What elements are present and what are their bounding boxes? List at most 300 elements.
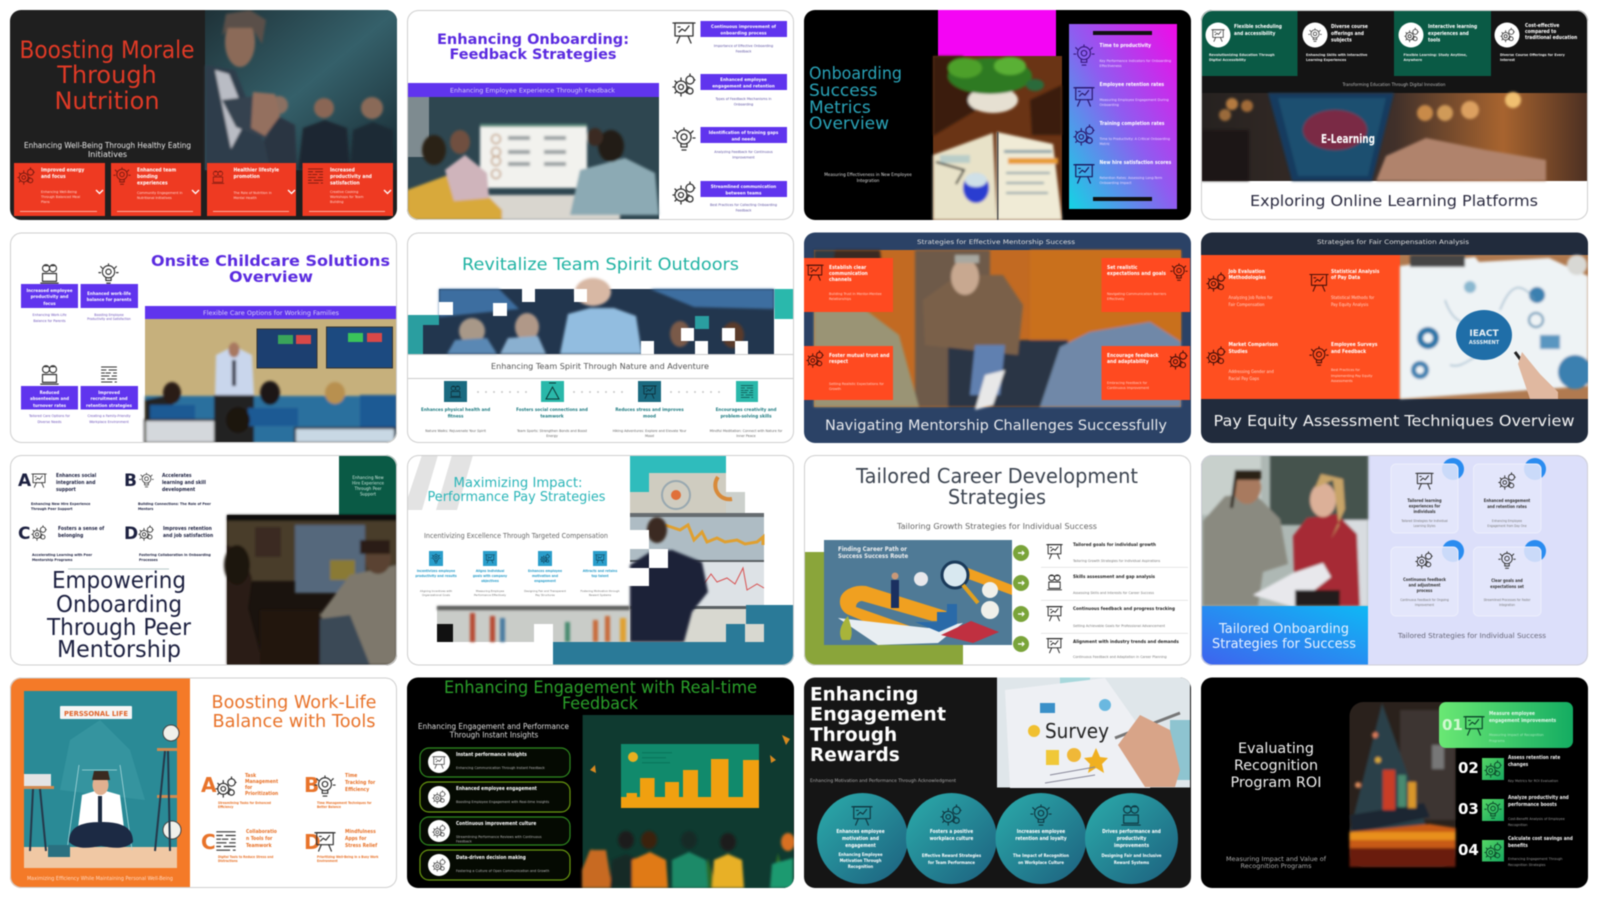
item: continuous improvement: onboarding process (720, 30, 767, 36)
item D: Mindfulness (345, 829, 376, 835)
title: Success (809, 81, 878, 101)
oval: workplace culture (906, 793, 997, 884)
card: clear goals: Streamlined Processes for Faster (1484, 598, 1531, 602)
photo: survey (997, 678, 1190, 788)
item: market comparison (1207, 342, 1278, 382)
item 04: benefits (1508, 843, 1528, 849)
item: align goals (473, 551, 507, 597)
item A: Prioritization (245, 791, 278, 797)
card: clear communication: channels (829, 277, 852, 283)
title (151, 254, 390, 283)
item 02: Assess retention rate (1508, 755, 1560, 761)
feature: flexible scheduling: and accessibility (1234, 31, 1275, 37)
item 04: Recognition Strategies (1508, 863, 1546, 867)
title (1230, 741, 1322, 791)
oval: motivation: Enhancing Employee (838, 852, 883, 857)
card: continuous feedback: Improvement (1415, 603, 1435, 607)
row: data-driven: Data-driven decision making (456, 855, 526, 861)
header text: Strategies for Effective Mentorship Success (917, 238, 1076, 246)
card: tailored learning (1391, 464, 1458, 533)
title: Overview (229, 268, 313, 286)
feature: cost-effective: Cost-effective (1525, 23, 1559, 29)
card: healthier lifestyle: The Role of Nutrition in (234, 191, 272, 195)
item: creativity: Mindful Meditation: Connect with Nature for (710, 429, 783, 433)
card: increased productivity: Increased (330, 168, 355, 174)
item: productivity: productivity and results (415, 574, 457, 578)
item: reduces stress: mood (643, 414, 656, 420)
title: Strategies (948, 485, 1046, 509)
card: healthier lifestyle: promotion (234, 174, 260, 180)
card: increased productivity (302, 163, 393, 216)
row: improvement culture: Feedback (456, 840, 472, 844)
item C: C (18, 524, 30, 544)
row: industry alignment (1047, 639, 1179, 659)
row: skills assessment: Skills assessment and gap analysis (1073, 574, 1156, 580)
feature: diverse course: Diverse course (1331, 24, 1368, 30)
oval: workplace culture: Effective Reward Strategies (922, 853, 982, 858)
item A (18, 471, 97, 511)
item: motivation: Designing Fair and Transparent (524, 589, 566, 593)
item B: Time Management Techniques for (317, 801, 372, 805)
title: Through Peer (46, 615, 192, 641)
item 02 (1458, 755, 1560, 783)
item 03: 03 (1458, 800, 1479, 818)
item: work-life balance: Enhanced work-life (87, 291, 131, 297)
item: market comparison: Studies (1228, 349, 1248, 355)
photo: mentoring discussion (814, 250, 1181, 410)
panel: Tailored Onboarding (1201, 455, 1588, 666)
title: Evaluating (1238, 741, 1314, 757)
blue title block: Strategies for Success (1212, 637, 1356, 652)
subtitle (418, 722, 569, 740)
item: creativity (710, 381, 783, 438)
title: Through (56, 61, 157, 89)
panel: Revitalize Team Spirit (407, 232, 794, 443)
card: clear goals: expectations set (1490, 584, 1524, 589)
row: data-driven: Fostering a Culture of Open Communication and Growth (456, 869, 549, 873)
item 02: Key Metrics for ROI Evaluation (1508, 779, 1558, 783)
card: feedback and adaptability (1102, 346, 1190, 400)
title: Performance Pay Strategies (428, 490, 606, 505)
subtitle: Tailoring Growth Strategies for Individual Success (896, 522, 1097, 531)
metrics panel (1069, 24, 1177, 209)
feature: diverse course: Learning Experiences (1306, 58, 1346, 62)
blue title block: Tailored Onboarding (1218, 622, 1349, 637)
item: recruitment: Workplace Environment (89, 420, 129, 424)
item: engagement and retention: Enhanced employee (720, 77, 767, 83)
item: engagement and retention: Onboarding (734, 102, 753, 106)
item B: Efficiency (345, 787, 369, 793)
item: training completion: Metric (1100, 142, 1110, 146)
item: productivity: Aligning Incentives with (420, 589, 452, 593)
subtitle: Integration (857, 178, 880, 184)
item: reduced absenteeism: turnover rates (33, 403, 67, 409)
item: productivity and focus: Enhancing Work-Life (32, 313, 66, 317)
subtitle: Through Instant Insights (449, 730, 538, 740)
item: productivity and focus (21, 265, 78, 323)
item D: Stress Relief (345, 843, 377, 849)
oval: retention and loyalty: The Impact of Recognition (1013, 853, 1069, 858)
card: realistic expectations: expectations and goals (1107, 271, 1166, 277)
item: social connections (516, 381, 588, 438)
item 02: 02 (1458, 759, 1479, 777)
title (212, 692, 376, 732)
item: reduces stress: Hiking Adventures: Explore and Elevate Your (613, 429, 687, 433)
title: Boosting Morale (20, 36, 194, 64)
subtitle: Initiatives (88, 150, 127, 159)
panel: Onsite Childcare (20, 254, 398, 444)
item: social connections: teamwork (540, 414, 564, 420)
row: employee engagement (420, 782, 570, 812)
card: feedback and adaptability: Continuous Improvement (1107, 386, 1150, 390)
title: Rewards (810, 745, 900, 766)
card: tailored learning: Learning Styles (1413, 524, 1436, 528)
card: clear goals: Clear goals and (1491, 578, 1523, 583)
title: Program ROI (1230, 775, 1322, 791)
row: tailored goals: Tailored goals for individual growth (1073, 542, 1156, 548)
item: training gaps (673, 127, 787, 160)
item: employee surveys (1310, 342, 1378, 383)
feature: cost-effective (1494, 22, 1577, 62)
banner: Flexible Care Options for Working Families (203, 309, 340, 317)
item: creativity: Encourages creativity and (716, 407, 776, 413)
card: clear goals: Integration (1499, 603, 1515, 607)
item B: Better Balance (317, 805, 341, 809)
oval: performance (1085, 793, 1178, 884)
header text: Strategies for Fair Compensation Analysis (1317, 238, 1470, 246)
oval: performance: Designing Fair and Inclusive (1102, 853, 1162, 858)
item: continuous improvement: Continuous improvement of (711, 24, 776, 30)
oval: retention and loyalty: on Workplace Culture (1018, 860, 1064, 865)
item: continuous improvement (673, 21, 787, 54)
item: continuous improvement: Feedback (736, 50, 751, 54)
item: work-life balance: Boosting Employee (94, 313, 124, 317)
item A: A (201, 773, 217, 797)
item B: B (304, 773, 319, 797)
item: motivation: Enhances employee (528, 569, 562, 573)
item: time to productivity: Key Performance Indicators for Onboarding (1100, 59, 1171, 63)
row: improvement culture (420, 817, 570, 845)
item: social connections: Team Sports: Strengthen Bonds and Boost (517, 429, 588, 433)
item: creativity: problem-solving skills (720, 414, 772, 420)
photo: assessment document: ASSSMENT (1469, 340, 1500, 346)
photo: data pyramid (1350, 702, 1456, 867)
item: employee surveys: Employee Surveys (1331, 342, 1378, 348)
card: feedback and adaptability: Encourage feedback (1107, 353, 1160, 359)
card: improved energy: Improved energy (41, 168, 84, 174)
item: engagement and retention: engagement and retention (712, 84, 775, 90)
item: physical health (421, 381, 490, 433)
feature: diverse course: offerings and (1331, 31, 1364, 37)
card: increased productivity: productivity and (330, 174, 372, 180)
item 01 highlighted: engagement improvements (1489, 718, 1557, 724)
item: creativity: Inner Peace (736, 434, 756, 438)
item D: Processes (139, 558, 158, 562)
item D: Fostering Collaboration in Onboarding (139, 553, 211, 557)
item: productivity: Organizational Goals (422, 593, 451, 597)
card: tailored learning: Tailored learning (1407, 498, 1442, 503)
feature: interactive learning: Anywhere (1404, 58, 1423, 62)
item: reduces stress: Reduces stress and improves (615, 407, 684, 413)
item B (124, 471, 211, 511)
green caption block (339, 455, 397, 515)
item: productivity and focus: productivity and (31, 294, 68, 300)
card: continuous feedback: and adjustment (1409, 582, 1441, 588)
item: recruitment: retention strategies (86, 403, 133, 409)
item A: Task (245, 773, 257, 779)
item D: D (304, 830, 321, 854)
feature: diverse course: subjects (1331, 38, 1352, 44)
card: team bonding: Community Engagement in (137, 191, 182, 195)
card: mutual trust: Growth (829, 387, 841, 391)
title: Onboarding (56, 592, 182, 618)
card: continuous feedback: process (1417, 588, 1432, 593)
item: reduced absenteeism: Diverse Needs (37, 420, 62, 424)
feature: flexible scheduling (1206, 22, 1282, 62)
item: streamlined communication: Feedback (736, 208, 751, 212)
item: streamlined communication (673, 181, 787, 212)
photo: gym coach (1201, 455, 1368, 607)
oval: retention and loyalty: Increases employee (1017, 829, 1065, 835)
panel: Boosting Morale (10, 10, 397, 220)
row: employee engagement: Enhanced employee engagement (456, 786, 537, 792)
item: work-life balance: Productivity and Satisfaction (87, 317, 131, 321)
item: motivation (524, 551, 566, 597)
illustration: personal life (24, 691, 181, 868)
panel: Navigating Mentorship (804, 232, 1191, 443)
divider lines and subtitle: Enhancing Team Spirit Through Nature and Adventure (491, 362, 709, 371)
item: recruitment (81, 367, 138, 424)
card: clear goals (1474, 547, 1541, 616)
panel: Enhancing Onboarding (407, 10, 794, 220)
item: reduced absenteeism: absenteeism and (30, 396, 69, 402)
card: tailored learning: experiences for (1409, 504, 1441, 508)
item: training completion: Time to Productivity: A Critical Onboarding (1100, 137, 1170, 141)
green caption block: Through Peer (354, 486, 382, 492)
card: increased productivity: Building (330, 200, 343, 204)
photo: analyst at charts (437, 473, 764, 642)
card: improved energy (14, 163, 105, 216)
item A: support (56, 487, 77, 493)
item A: Enhances social (56, 473, 97, 479)
item: reduced absenteeism (21, 366, 78, 424)
item: time to productivity: Effectiveness (1100, 64, 1122, 68)
item: streamlined communication: Streamlined communication (711, 184, 776, 190)
title: Feedback (562, 694, 638, 714)
title (437, 32, 629, 63)
item: align goals: Measuring Employee (476, 589, 504, 593)
item: reduces stress (613, 381, 687, 438)
title: Engagement (810, 704, 946, 726)
item 01 highlighted: 01 (1442, 716, 1463, 734)
item: top talent (580, 551, 620, 597)
oval: performance: productivity (1117, 836, 1146, 842)
item 04: 04 (1458, 841, 1479, 859)
item: align goals: goals with company (473, 574, 507, 578)
item D: D (124, 524, 138, 544)
item 01 highlighted (1439, 702, 1573, 748)
photo: plant and notebook (933, 56, 1062, 220)
item B: Accelerates (162, 473, 192, 479)
item A: Through Peer Support (31, 507, 73, 511)
item 03: Cost-Benefit Analysis of Employee (1508, 817, 1565, 821)
item: streamlined communication: Best Practices for Collecting Onboarding (710, 203, 777, 207)
subtitle: Measuring Effectiveness in New Employee (824, 172, 912, 178)
item: top talent: Reward Systems (589, 593, 612, 597)
item: employee surveys: Implementing Pay Equity (1331, 374, 1373, 378)
caption: Maximizing Efficiency While Maintaining Personal Well-Being (27, 876, 173, 882)
card: clear communication (804, 258, 893, 312)
item: engagement and retention (673, 74, 787, 106)
feature: cost-effective: compared to (1525, 29, 1556, 35)
subtitle (24, 141, 191, 159)
item: job evaluation (1207, 269, 1273, 308)
item: retention rates: Measuring Employee Engagement During (1100, 98, 1169, 102)
item: recruitment: Creating a Family-Friendly (87, 414, 131, 418)
item: training gaps: and needs (731, 136, 756, 142)
title (444, 678, 757, 714)
row: tailored goals: Tailoring Growth Strategies for Individual Aspirations (1073, 559, 1161, 563)
item 04: Enhancing Engagement Through (1508, 857, 1562, 861)
item A: Management (245, 779, 279, 785)
item 04 (1458, 836, 1573, 867)
title: Nutrition (54, 87, 160, 115)
oval: retention and loyalty: retention and loyalty (1015, 836, 1067, 842)
item C: C (201, 830, 216, 854)
photo: survey: Survey (1045, 719, 1109, 743)
card: healthier lifestyle: Healthier lifestyle (234, 168, 279, 174)
feature: flexible scheduling: Digital Accessibility (1209, 58, 1247, 62)
row: tailored goals (1047, 542, 1161, 563)
item C: Collaboratio (246, 829, 277, 835)
photo: e-learning laptop: E-Learning (1321, 132, 1375, 146)
subtitle: Incentivizing Excellence Through Targeted Compensation (424, 532, 608, 540)
card: team bonding: Nutritional Initiatives (137, 196, 172, 200)
green block (804, 552, 963, 666)
item: productivity: Incentivizes employee (417, 569, 455, 573)
item: recruitment: Improved (98, 390, 120, 396)
panel: Pay Equity (1201, 232, 1592, 443)
item: physical health: fitness (448, 414, 464, 420)
item 01 highlighted: Measure employee (1489, 711, 1535, 717)
item D (304, 829, 379, 863)
item A: Enhancing New Hire Experience (31, 502, 91, 506)
photo: control room (145, 319, 397, 445)
feature: flexible scheduling: Revolutionizing Education Through (1209, 53, 1275, 57)
photo: assessment document (1400, 255, 1592, 399)
card: improved energy: Plans (41, 200, 50, 204)
item B: B (124, 471, 137, 491)
card: mutual trust: Setting Realistic Expectations for (829, 382, 885, 386)
blue blocks (553, 605, 794, 666)
item: align goals: Aligns individual (476, 569, 504, 573)
item: employee surveys: Assessments (1331, 379, 1353, 383)
item: statistical analysis: of Pay Data (1331, 275, 1360, 281)
item: satisfaction scores (1074, 160, 1172, 185)
feature: flexible scheduling: Flexible scheduling (1234, 24, 1282, 30)
item B: Tracking for (345, 780, 376, 786)
panel: Online Learning (1201, 10, 1588, 220)
oval: workplace culture: workplace culture (930, 836, 973, 842)
item C: Digital Tools to Reduce Stress and (218, 855, 273, 859)
card: tailored learning: Tailored Strategies for Individual (1401, 519, 1448, 523)
title: Overview (809, 114, 889, 134)
red panel (1201, 255, 1400, 399)
item: time to productivity (1074, 43, 1171, 68)
item: market comparison: Racial Pay Gaps (1228, 376, 1259, 382)
feature: diverse course (1302, 22, 1368, 62)
card: engagement and retention: and retention rates (1487, 504, 1527, 509)
item: recruitment: recruitment and (90, 396, 128, 402)
title: Revitalize Team Spirit Outdoors (462, 255, 739, 275)
photo: audience and bar chart (582, 715, 795, 888)
card: continuous feedback: Continuous feedback (1403, 577, 1446, 582)
row: instant insights: Enhancing Communication Through Instant Feedback (456, 766, 545, 770)
item: streamlined communication: between teams (726, 190, 762, 196)
item A: Efficiency (218, 805, 234, 809)
accent rule (68, 568, 169, 570)
title (855, 464, 1138, 509)
card: continuous feedback: Continuous Feedback for Ongoing (1400, 598, 1449, 602)
item A: integration and (56, 480, 95, 486)
item 01 highlighted: Programs (1489, 739, 1505, 743)
title: Through (810, 725, 897, 746)
item: employee surveys: and Feedback (1331, 349, 1367, 355)
item: reduces stress: Mood (645, 434, 654, 438)
illustration: career path: Finding Career Path or (838, 546, 907, 553)
item: top talent: Attracts and retains (583, 569, 617, 573)
panel: Real-time Feedback (407, 678, 795, 888)
title: Balance with Tools (212, 711, 376, 732)
item D: Improves retention (163, 526, 212, 532)
card: increased productivity: Creative Cooking (330, 190, 358, 194)
title: Enhancing Onboarding: (437, 32, 629, 48)
subtitle: Enhancing Engagement and Performance (418, 722, 569, 731)
oval: workplace culture: for Team Performance (928, 860, 975, 865)
illustration: career path: Success Success Route (838, 553, 908, 560)
title: Onboarding (809, 64, 902, 84)
oval: motivation: Motivation Through (840, 858, 882, 863)
title: Pay Equity Assessment Techniques Overview (1214, 412, 1574, 430)
photo: assessment document: IEACT (1469, 329, 1499, 339)
oval: performance: Reward Systems (1114, 860, 1150, 865)
item: satisfaction scores: Onboarding Impact (1100, 181, 1132, 185)
photo: mentoring conversation (224, 515, 397, 666)
item: productivity and focus: Balance for Parents (33, 319, 66, 323)
card: team bonding (111, 163, 201, 216)
title: Navigating Mentorship Challenges Successfully (825, 418, 1167, 434)
item: top talent: top talent (591, 574, 609, 578)
oval: motivation: Enhances employee (836, 829, 885, 835)
title: Mentorship (57, 637, 181, 663)
item A (201, 773, 279, 809)
title: Tailored Career Development (855, 464, 1138, 488)
title: Onsite Childcare Solutions (151, 252, 390, 270)
accent circles (1442, 458, 1546, 562)
item C: Accelerating Learning with Peer (32, 553, 92, 557)
caption: Tailored Strategies for Individual Success (1397, 632, 1546, 640)
panel: Work-Life Balance (10, 678, 397, 888)
feature: interactive learning: experiences and (1428, 31, 1469, 37)
item: statistical analysis: Pay Equity Analysis (1331, 302, 1368, 308)
item: productivity and focus: Increased employee (27, 288, 73, 294)
item: motivation: motivation and (532, 574, 558, 578)
card: engagement and retention: Engagement from Day One (1487, 524, 1527, 528)
item: physical health: Enhances physical health and (421, 407, 490, 413)
item: retention rates: Employee retention rates (1100, 82, 1164, 88)
feature: cost-effective: Diverse Course Offerings for Every (1500, 53, 1566, 57)
item: statistical analysis: Statistical Analysis (1331, 269, 1380, 275)
